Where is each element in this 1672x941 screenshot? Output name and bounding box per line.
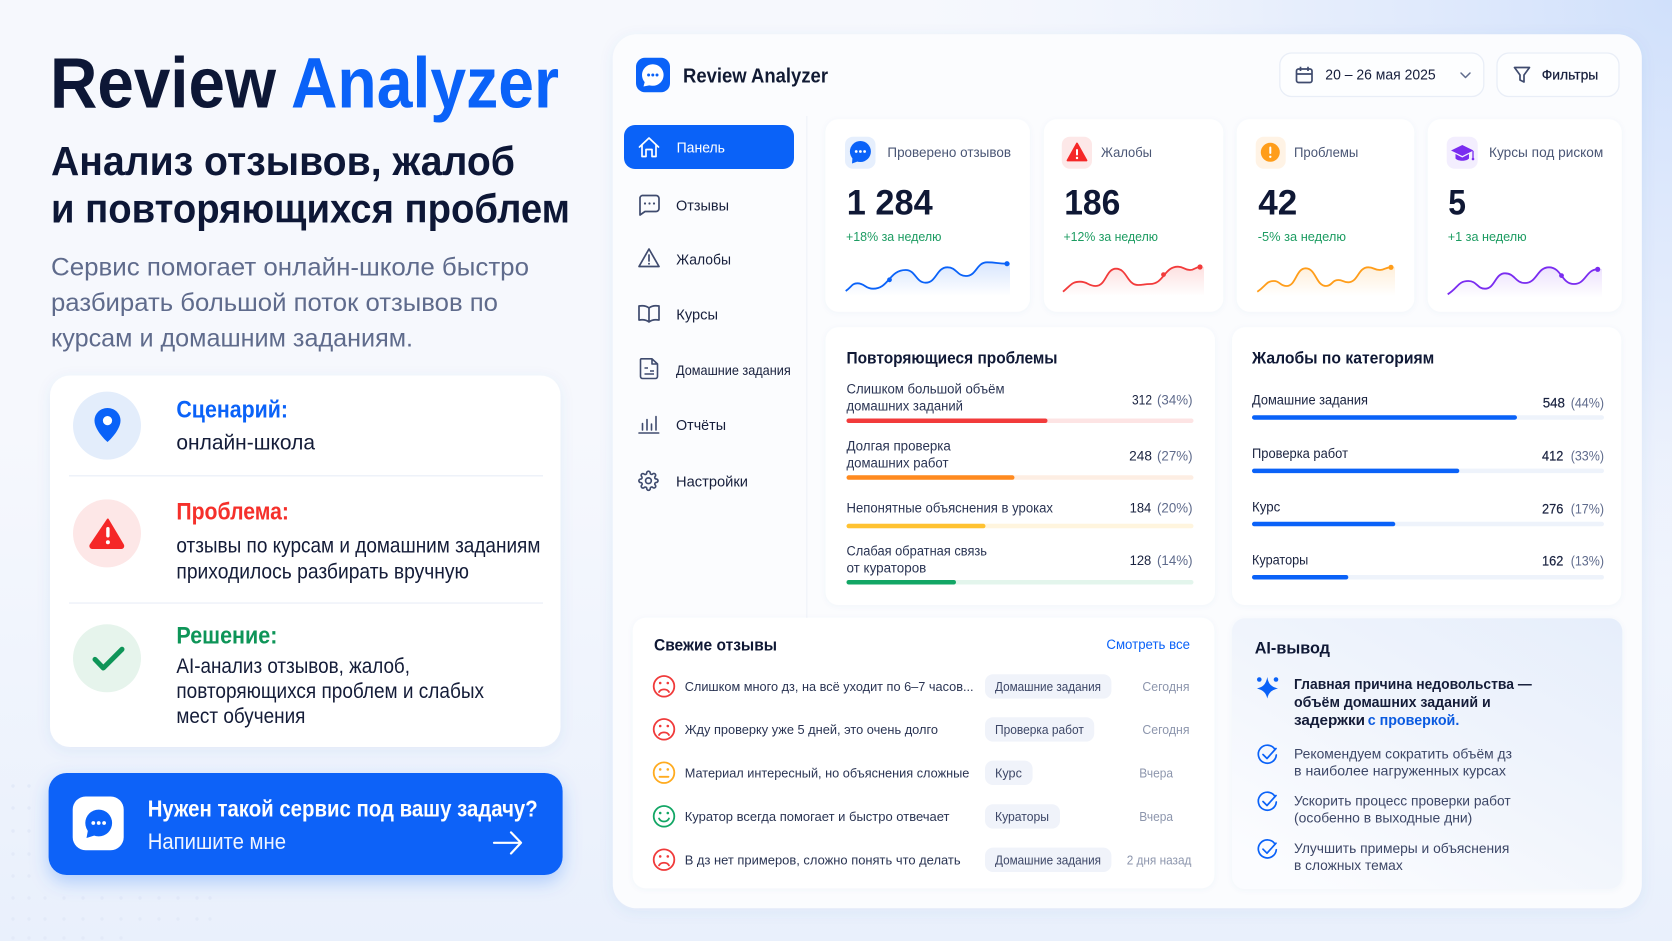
key takeaway: объём домашних заданий и xyxy=(1294,695,1491,711)
KPI card: problems: Проблемы xyxy=(1294,144,1358,160)
subtitle heading xyxy=(51,138,570,232)
solution block xyxy=(73,622,484,728)
review row 5 xyxy=(654,848,1192,872)
recommendation 2: Ускорить процесс проверки работ xyxy=(1294,793,1511,809)
review row 5: 2 дня назад xyxy=(1127,853,1192,867)
panel: complaints by category: Жалобы по категориям xyxy=(1251,348,1434,367)
category row 1: (44%) xyxy=(1571,395,1604,410)
scenario block: Сценарий: xyxy=(176,396,288,423)
review row 3: Вчера xyxy=(1139,766,1173,780)
nav item: Отзывы xyxy=(640,196,729,215)
panel: recent reviews xyxy=(633,618,1214,888)
problem row 3 xyxy=(846,500,1194,528)
title: Analyzer xyxy=(291,44,559,123)
nav item: Жалобы xyxy=(639,249,731,268)
description text: Сервис помогает онлайн-школе быстро xyxy=(51,253,529,281)
solution block: Решение: xyxy=(176,622,277,649)
category row 1 xyxy=(1252,392,1604,420)
category row 2: 412 xyxy=(1542,448,1563,463)
problem row 3: 184 xyxy=(1130,500,1152,515)
description text xyxy=(51,253,529,353)
sparkline xyxy=(1257,265,1395,296)
category row 1: 548 xyxy=(1543,395,1565,410)
KPI card: reviews checked: 1 284 xyxy=(847,183,933,222)
problem row 4: от кураторов xyxy=(846,560,926,575)
review row 1: Домашние задания xyxy=(995,680,1101,694)
key takeaway xyxy=(1294,677,1532,729)
nav item: Отчёты xyxy=(639,416,726,434)
KPI card: complaints: Жалобы xyxy=(1101,144,1152,160)
problem row 1 xyxy=(846,381,1194,423)
description text: разбирать большой поток отзывов по xyxy=(51,289,498,317)
category row 2: Проверка работ xyxy=(1252,446,1348,461)
review row 1 xyxy=(654,674,1190,699)
icon: sparkle xyxy=(1257,677,1278,698)
nav item: Панель (active) xyxy=(624,125,794,169)
icon: calendar xyxy=(1296,67,1312,82)
sparkline xyxy=(1063,264,1204,296)
category row 2 xyxy=(1252,446,1604,473)
key takeaway: Главная причина недовольства — xyxy=(1294,677,1532,693)
review row 4: Кураторы xyxy=(995,810,1049,824)
recommendation 2 xyxy=(1258,792,1511,826)
panel: recurring problems xyxy=(826,327,1215,605)
recommendation 1 xyxy=(1258,745,1512,779)
KPI card: problems: -5% за неделю xyxy=(1258,229,1346,244)
key takeaway: с проверкой. xyxy=(1368,713,1459,729)
problem block: Проблема: xyxy=(176,499,289,526)
KPI card: complaints: 186 xyxy=(1064,183,1120,222)
review row 4: Вчера xyxy=(1139,810,1173,824)
KPI card: complaints: +12% за неделю xyxy=(1064,229,1158,244)
nav item: Жалобы: Жалобы xyxy=(676,251,731,268)
problem row 2: (27%) xyxy=(1157,449,1192,464)
sidebar navigation xyxy=(624,125,794,491)
problem row 3: (20%) xyxy=(1157,500,1192,515)
recommendation 1: в наиболее нагруженных курсах xyxy=(1294,763,1506,779)
icon: exclamation tile xyxy=(1256,137,1286,169)
review row 3: Курс xyxy=(995,766,1022,780)
category row 3: Курс xyxy=(1252,500,1281,515)
review row 5: Домашние задания xyxy=(995,853,1101,867)
review row 2: Проверка работ xyxy=(995,723,1084,737)
key takeaway: задержки xyxy=(1294,713,1365,729)
recommendation 3: Улучшить примеры и объяснения xyxy=(1294,840,1509,856)
recommendation 1: Рекомендуем сократить объём дз xyxy=(1294,745,1512,761)
problem row 4: (14%) xyxy=(1157,553,1192,568)
icon: green check xyxy=(73,624,141,692)
nav item: Домашние задания: Домашние задания xyxy=(676,362,791,378)
review row 2: Жду проверку уже 5 дней, это очень долго xyxy=(685,722,938,737)
category row 4: Кураторы xyxy=(1252,552,1308,567)
solution block: мест обучения xyxy=(176,705,305,728)
title xyxy=(50,44,559,123)
KPI card: reviews checked: +18% за неделю xyxy=(846,229,942,244)
callout: contact button xyxy=(49,773,563,875)
KPI card: courses at risk: 5 xyxy=(1448,183,1466,222)
title: Review xyxy=(50,44,277,123)
link: view all: Смотреть все xyxy=(1106,637,1190,652)
date picker xyxy=(1280,53,1484,96)
scenario block: онлайн-школа xyxy=(176,430,315,454)
KPI card: reviews checked xyxy=(825,119,1030,312)
review row 5: В дз нет примеров, сложно понять что делать xyxy=(685,852,961,867)
recommendation 3 xyxy=(1258,840,1509,873)
dashboard header logo xyxy=(636,58,670,92)
recommendation 3: в сложных темах xyxy=(1294,857,1403,873)
nav item: Настройки xyxy=(639,471,748,491)
nav item: Настройки: Настройки xyxy=(676,474,748,491)
solution block: AI-анализ отзывов, жалоб, xyxy=(176,655,410,678)
callout: contact button: Нужен такой сервис под вашу задачу? xyxy=(148,796,538,822)
problem block: приходилось разбирать вручную xyxy=(176,561,469,584)
problem row 2: домашних работ xyxy=(846,455,948,470)
panel: recurring problems: Повторяющиеся проблемы xyxy=(846,348,1058,367)
KPI card: courses at risk: +1 за неделю xyxy=(1448,229,1527,244)
problem row 2 xyxy=(846,439,1194,480)
review row 3 xyxy=(654,761,1173,785)
category row 3: 276 xyxy=(1542,502,1563,517)
filters button: Фильтры xyxy=(1542,66,1598,82)
KPI card: problems xyxy=(1237,119,1414,312)
scenario block xyxy=(73,392,315,460)
category row 3 xyxy=(1252,500,1604,526)
KPI card: problems: 42 xyxy=(1258,183,1297,222)
icon: chat tile xyxy=(845,137,876,169)
category row 3: (17%) xyxy=(1571,502,1604,517)
KPI card: reviews checked: Проверено отзывов xyxy=(887,144,1011,160)
nav item: Курсы xyxy=(639,306,718,323)
review row 3: Материал интересный, но объяснения сложные xyxy=(685,765,969,780)
review row 4 xyxy=(654,804,1173,829)
panel: complaints by category xyxy=(1232,327,1621,605)
icon: location pin xyxy=(73,392,141,460)
KPI card: courses at risk xyxy=(1428,119,1622,312)
nav item: Отчёты: Отчёты xyxy=(676,417,726,434)
panel: recent reviews: Свежие отзывы xyxy=(654,636,777,655)
nav item: Курсы: Курсы xyxy=(676,306,718,323)
problem row 1: Слишком большой объём xyxy=(846,381,1004,396)
problem row 1: домашних заданий xyxy=(846,398,963,413)
KPI card: courses at risk: Курсы под риском xyxy=(1489,144,1603,160)
panel: AI conclusion: AI-вывод xyxy=(1255,638,1330,658)
sparkline xyxy=(1448,267,1602,298)
category row 1: Домашние задания xyxy=(1252,392,1368,407)
review row 4: Куратор всегда помогает и быстро отвечает xyxy=(685,809,950,824)
category row 4: 162 xyxy=(1542,554,1563,569)
KPI card: complaints xyxy=(1044,119,1223,312)
review row 2: Сегодня xyxy=(1142,723,1190,737)
category row 2: (33%) xyxy=(1571,448,1604,463)
subtitle heading: и повторяющихся проблем xyxy=(51,186,570,232)
nav item: Панель (active): Панель xyxy=(677,140,725,157)
description text: курсам и домашним заданиям. xyxy=(51,325,413,353)
icon: warning triangle xyxy=(73,499,141,567)
panel: AI conclusion xyxy=(1232,618,1622,889)
dashboard name: Review Analyzer xyxy=(683,65,828,87)
review row 1: Сегодня xyxy=(1142,680,1190,694)
icon: graduation cap tile xyxy=(1447,137,1478,169)
category row 4 xyxy=(1252,552,1604,580)
arrow xyxy=(494,832,521,854)
problem row 1: (34%) xyxy=(1157,392,1192,407)
problem row 3: Непонятные объяснения в уроках xyxy=(846,500,1053,515)
recommendation 2: (особенно в выходные дни) xyxy=(1294,810,1472,826)
date picker: 20 – 26 мая 2025 xyxy=(1325,66,1436,83)
review row 1: Слишком много дз, на всё уходит по 6–7 часов... xyxy=(685,679,974,694)
problem row 1: 312 xyxy=(1132,392,1152,407)
panel: scenario, problem, solution xyxy=(50,376,560,747)
problem block: отзывы по курсам и домашним заданиям xyxy=(176,535,540,558)
icon: white chat tile xyxy=(73,796,124,850)
filters button xyxy=(1497,53,1619,96)
problem row 2: 248 xyxy=(1129,449,1152,464)
review row 2 xyxy=(654,717,1190,742)
callout: contact button: Напишите мне xyxy=(148,829,286,854)
nav item: Отзывы: Отзывы xyxy=(676,197,729,214)
category row 4: (13%) xyxy=(1571,554,1604,569)
icon: warning tile xyxy=(1062,137,1092,169)
panel: dashboard xyxy=(613,34,1642,908)
solution block: повторяющихся проблем и слабых xyxy=(176,680,484,703)
sparkline xyxy=(846,261,1010,296)
nav item: Домашние задания xyxy=(640,359,791,378)
problem row 2: Долгая проверка xyxy=(846,439,951,454)
problem row 4: Слабая обратная связь xyxy=(846,544,987,559)
problem row 4 xyxy=(846,544,1194,584)
problem row 4: 128 xyxy=(1130,553,1151,568)
subtitle heading: Анализ отзывов, жалоб xyxy=(51,138,515,184)
icon: funnel xyxy=(1514,68,1530,82)
problem block xyxy=(73,499,540,584)
